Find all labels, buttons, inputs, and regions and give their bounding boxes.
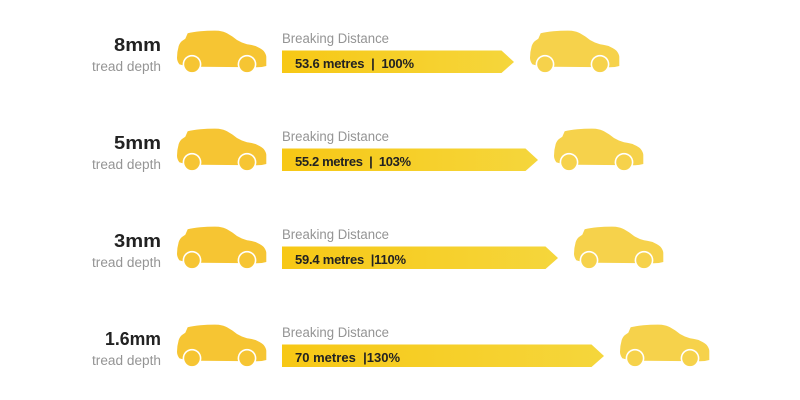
tread depth label: 3mm	[92, 231, 161, 270]
distance arrow	[282, 246, 558, 269]
row: 8mm	[92, 31, 619, 74]
icon: stopped car	[620, 325, 709, 368]
breaking distance heading: Breaking Distance	[282, 129, 389, 144]
icon: start car	[177, 227, 266, 270]
distance value: 53.6 metres | 100%	[295, 56, 414, 71]
distance value: 70 metres |130%	[295, 350, 400, 365]
icon: start car	[177, 31, 266, 74]
tread depth label: 5mm	[92, 133, 161, 172]
tread depth label: 1.6mm	[92, 329, 161, 368]
breaking distance heading: Breaking Distance	[282, 31, 389, 46]
icon: start car	[177, 129, 266, 172]
row: 3mm	[92, 227, 663, 270]
distance arrow	[282, 50, 514, 73]
tread depth label: 1.6mm: 1.6mm	[105, 329, 161, 349]
distance value: 59.4 metres |110%	[295, 252, 406, 267]
tread depth label: 8mm	[92, 35, 161, 74]
distance value: 55.2 metres | 103%	[295, 154, 411, 169]
row: 1.6mm	[92, 325, 709, 368]
breaking distance heading: Breaking Distance	[282, 325, 389, 340]
tread depth label: 3mm: tread depth	[92, 255, 161, 270]
distance arrow	[282, 344, 604, 367]
icon: stopped car	[554, 129, 643, 172]
tread depth label: 8mm: tread depth	[92, 59, 161, 74]
tread depth label: 5mm: 5mm	[114, 133, 161, 153]
icon: stopped car	[530, 31, 619, 74]
tread depth label: 3mm: 3mm	[114, 231, 161, 251]
tread depth label: 8mm: 8mm	[114, 35, 161, 55]
tread depth label: 5mm: tread depth	[92, 157, 161, 172]
distance arrow	[282, 148, 538, 171]
icon: start car	[177, 325, 266, 368]
breaking distance heading: Breaking Distance	[282, 227, 389, 242]
icon: stopped car	[574, 227, 663, 270]
tread depth label: 1.6mm: tread depth	[92, 353, 161, 368]
row: 5mm	[92, 129, 643, 172]
